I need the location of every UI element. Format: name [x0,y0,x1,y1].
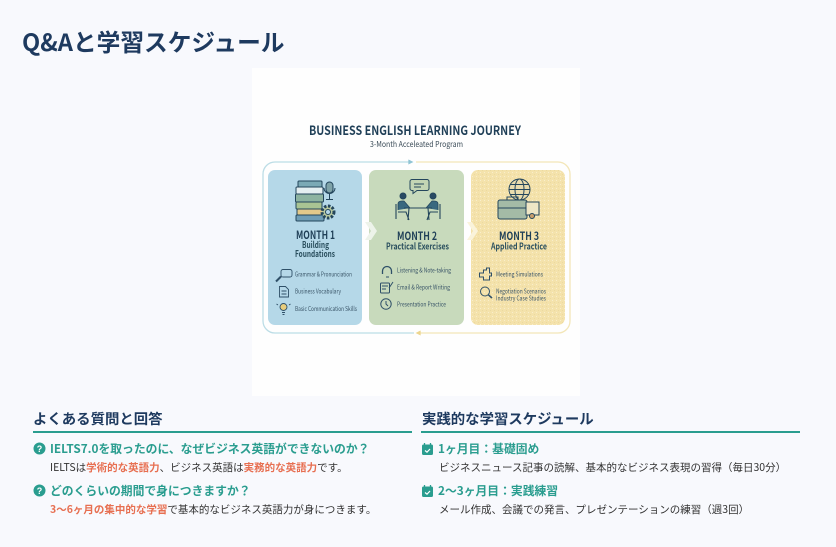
list: month 2 items: Presentation Practice [397,299,446,309]
panel: FAQ [33,408,412,516]
question 2: どのくらいの期間で身につきますか？ [50,482,251,499]
month 2 heading: MONTH 2 [397,228,437,244]
icon: books and microphone [296,181,335,221]
card: month 3 [467,170,565,325]
schedule step 2 heading: 2〜3ヶ月目：実践練習 [438,482,558,499]
icons: month 2 items [380,266,393,309]
schedule heading: 実践的な学習スケジュール [422,408,594,428]
question 1: IELTS7.0を取ったのに、なぜビジネス英語ができないのか？ [50,440,369,457]
icon: question 2: ? [37,486,42,496]
list: month 1 items [295,268,357,313]
list: month 2 items: Email & Report Writing [397,282,450,292]
card: month 1: Building [302,238,329,251]
icons: month 3 items [480,268,492,298]
list: month 3 items: Meeting Simulations [496,269,543,279]
icon: question 1 [34,442,46,454]
month 1 heading: MONTH 1 [296,227,335,243]
icon: question 2 [34,484,46,496]
list: month 3 items: Industry Case Studies [496,293,546,303]
infographic image: business English learning journey [262,120,571,336]
list: month 2 items [397,265,451,309]
answer 1: IELTSは学術的な英語力、ビジネス英語は実務的な英語力です。 [50,460,348,474]
chevron: month 2 to month 3 [467,222,478,240]
answer 2: 3〜6ヶ月の集中的な学習で基本的なビジネス英語力が身につきます。 [50,502,376,516]
panel: schedule [421,408,800,516]
card: month 1 [268,170,362,325]
icon: two people at a table with speech bubble [396,180,440,220]
card: month 2: Practical Exercises [386,240,449,252]
cycle arrows frame [263,160,570,334]
card: month 2 [365,170,464,325]
list: month 2 items: Listening & Note-taking [397,265,451,275]
list: month 1 items: Basic Communication Skills [295,303,357,313]
schedule heading rule [421,431,800,433]
title: Q&Aと学習スケジュール [22,24,284,58]
chevron: month 1 to month 2 [365,222,377,240]
card: month 1: Foundations [295,247,335,260]
FAQ heading: よくある質問と回答 [33,408,163,428]
icon: globe, briefcase and certificate [498,179,539,219]
schedule step 1 text: ビジネスニュース記事の読解、基本的なビジネス表現の習得（毎日30分） [439,460,786,474]
icon: calendar 1 [422,443,433,455]
schedule step 2 text: メール作成、会議での発言、プレゼンテーションの練習（週3回） [439,502,749,516]
image title: BUSINESS ENGLISH LEARNING JOURNEY [309,120,521,139]
list: month 3 items: Negotiation Scenarios [496,286,546,296]
list: month 1 items: Grammar & Pronunciation [295,268,352,278]
month 3 heading: MONTH 3 [499,228,539,244]
icon: question 1: ? [37,444,42,454]
icons: month 1 items [276,270,292,314]
list: month 1 items: Business Vocabulary [295,286,341,296]
icon: calendar 2 [422,485,433,497]
list: month 3 items [496,269,546,303]
image subtitle: 3-Month Acceleated Program [370,139,463,150]
schedule step 1 heading: 1ヶ月目：基礎固め [438,440,539,457]
FAQ heading rule [33,431,412,433]
card: month 3: Applied Practice [490,240,547,252]
